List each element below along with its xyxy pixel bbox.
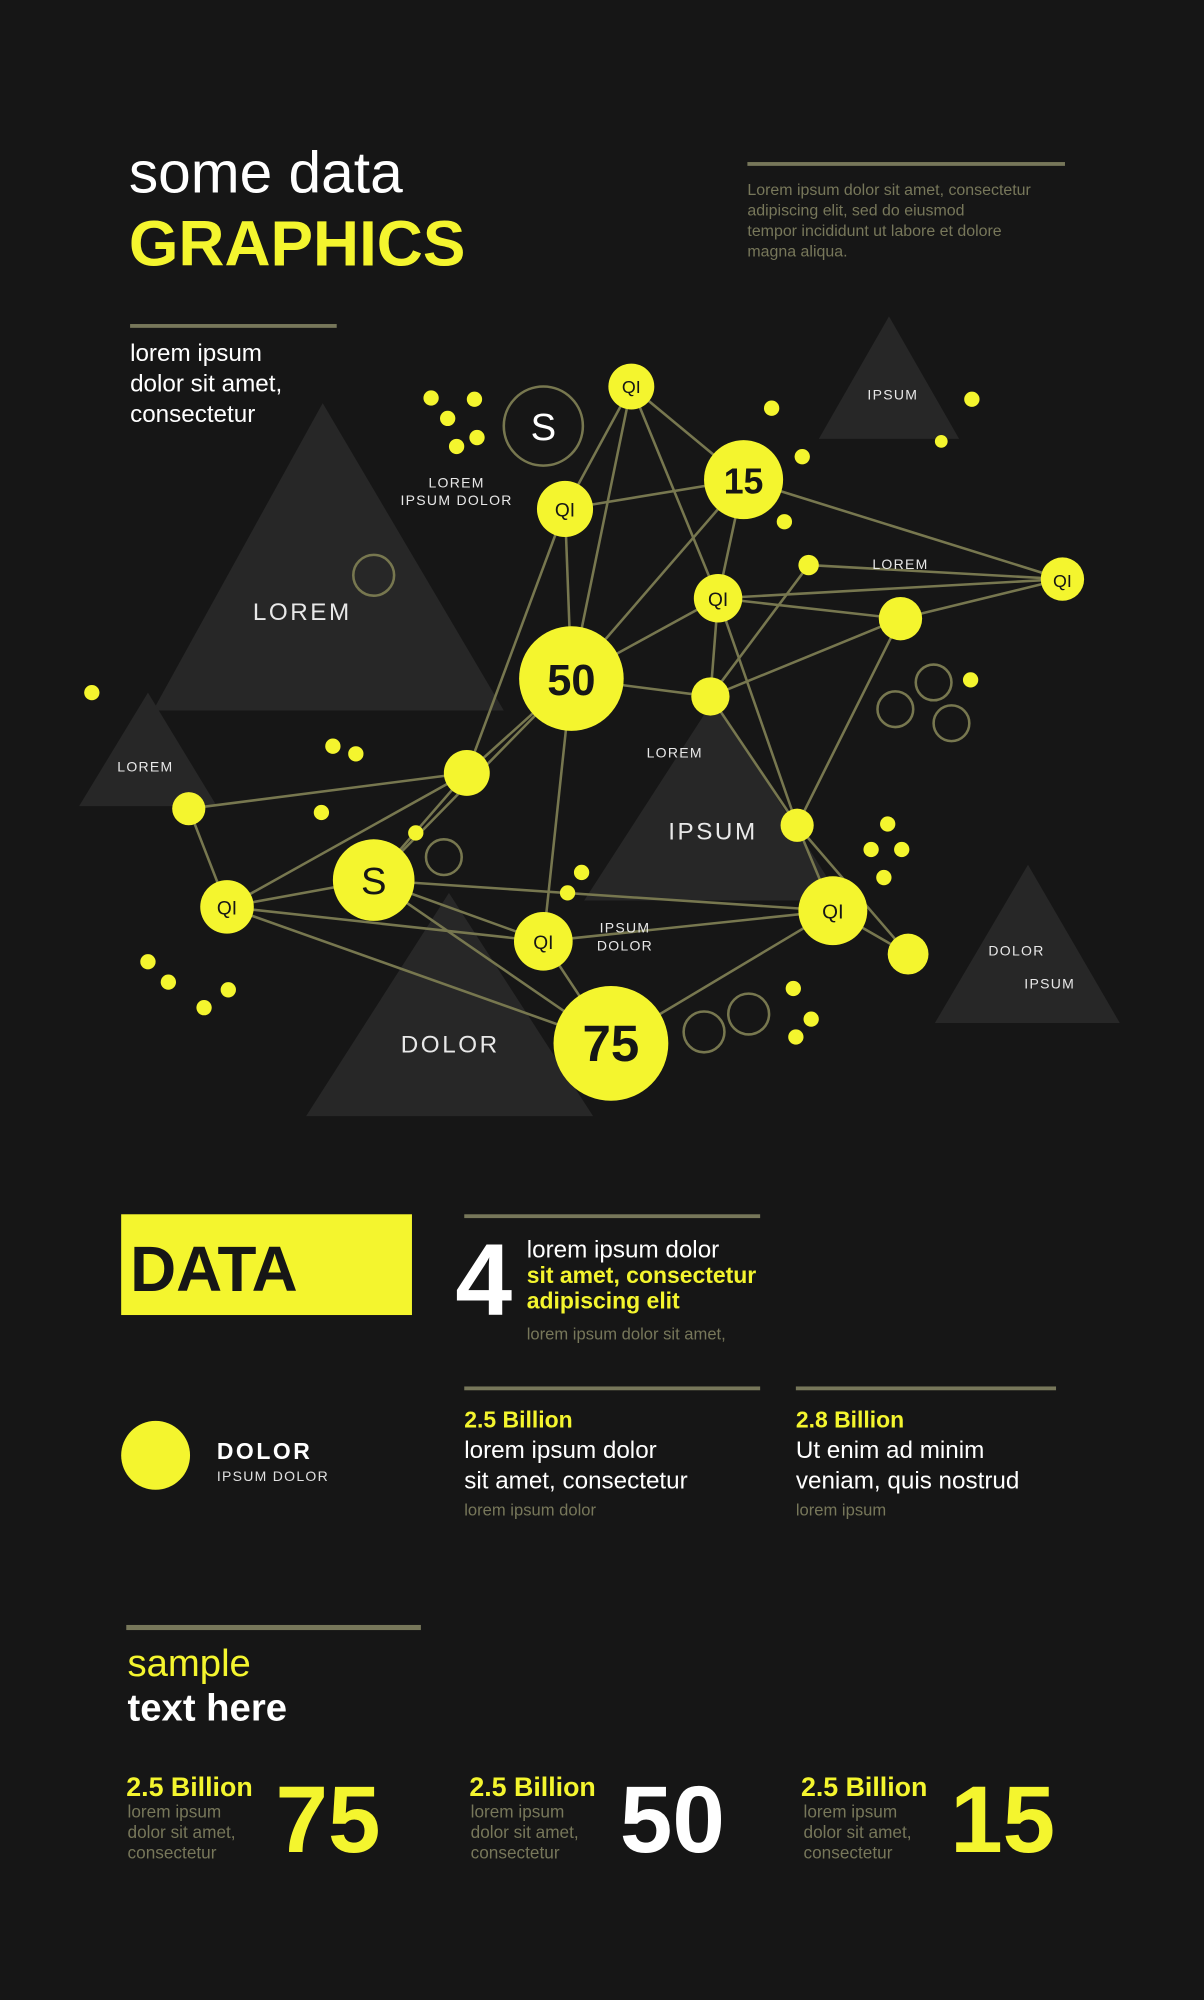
triangle labels: IPSUM xyxy=(867,386,918,402)
subtitle text xyxy=(130,324,337,428)
node labels: QI xyxy=(533,933,553,954)
node labels: QI xyxy=(555,501,575,522)
triangle labels: IPSUM xyxy=(600,919,650,935)
node labels: QI xyxy=(1053,571,1072,591)
bottom stat 50: dolor sit amet, xyxy=(471,1822,579,1842)
bottom stat 50: 50 xyxy=(620,1768,725,1873)
node labels: 50 xyxy=(547,657,596,705)
background triangles xyxy=(79,316,1120,1116)
bottom stat 50: consectetur xyxy=(471,1842,560,1862)
intro paragraph top right xyxy=(747,162,1065,260)
node labels: QI xyxy=(822,901,844,923)
stat 2.8 Billion: 2.8 Billion xyxy=(796,1406,904,1432)
intro paragraph top right: adipiscing elit, sed do eiusmod xyxy=(747,203,964,220)
stat 2.5 Billion: sit amet, consectetur xyxy=(464,1467,688,1494)
big 4 text block: 4 xyxy=(455,1223,512,1337)
stat 2.5 Billion xyxy=(464,1386,760,1519)
bottom stat 75: 75 xyxy=(275,1768,380,1873)
stat 2.8 Billion: veniam, quis nostrud xyxy=(796,1467,1019,1494)
small dots xyxy=(84,390,980,1045)
stat 2.5 Billion: lorem ipsum dolor xyxy=(464,1437,657,1464)
DOLOR legend: DOLOR xyxy=(217,1438,312,1464)
triangle labels: DOLOR xyxy=(988,942,1045,958)
bottom stat 75: lorem ipsum xyxy=(128,1802,221,1822)
triangle labels: IPSUM xyxy=(668,818,758,845)
bottom stat 75: dolor sit amet, xyxy=(128,1822,236,1842)
bottom stat 15: lorem ipsum xyxy=(804,1802,897,1822)
network nodes xyxy=(172,364,1084,1101)
big 4 text block: lorem ipsum dolor xyxy=(527,1237,719,1264)
triangle labels: IPSUM xyxy=(1024,976,1075,992)
node labels: QI xyxy=(622,377,641,397)
node labels: S xyxy=(361,860,386,903)
bottom stat 15 xyxy=(801,1768,1055,1873)
DOLOR legend xyxy=(121,1421,329,1490)
title: GRAPHICS xyxy=(129,207,465,279)
stat 2.8 Billion xyxy=(796,1386,1056,1519)
node labels: 75 xyxy=(583,1015,639,1072)
DATA block xyxy=(121,1214,412,1315)
intro paragraph top right: tempor incididunt ut labore et dolore xyxy=(747,223,1002,240)
node labels: QI xyxy=(708,590,728,611)
subtitle text: consectetur xyxy=(130,401,255,428)
sample text heading: sample xyxy=(128,1642,251,1685)
triangle labels: DOLOR xyxy=(597,937,653,953)
stat 2.8 Billion: lorem ipsum xyxy=(796,1500,886,1519)
subtitle text: dolor sit amet, xyxy=(130,371,282,398)
DOLOR legend: IPSUM DOLOR xyxy=(217,1468,329,1484)
bottom stat 15: consectetur xyxy=(804,1842,893,1862)
triangle labels: LOREM xyxy=(253,599,352,626)
outline circles xyxy=(353,387,969,1052)
intro paragraph top right: Lorem ipsum dolor sit amet, consectetur xyxy=(747,182,1032,199)
big 4 text block xyxy=(455,1214,760,1343)
stat 2.5 Billion: lorem ipsum dolor xyxy=(464,1500,596,1519)
triangle labels: LOREM xyxy=(117,759,174,775)
bottom stat 75 xyxy=(126,1768,380,1873)
triangle labels: DOLOR xyxy=(401,1031,500,1058)
intro paragraph top right: magna aliqua. xyxy=(747,243,848,260)
network lines xyxy=(189,387,1062,1043)
bottom stat 50: 2.5 Billion xyxy=(469,1772,596,1802)
S outline label: S xyxy=(531,406,556,449)
sample text heading: text here xyxy=(128,1687,287,1730)
node labels: QI xyxy=(217,899,237,920)
bottom stat 75: 2.5 Billion xyxy=(126,1772,253,1802)
triangle labels xyxy=(117,386,1075,1058)
stat 2.5 Billion: 2.5 Billion xyxy=(464,1406,573,1432)
triangle labels: LOREM xyxy=(872,556,929,572)
stat 2.8 Billion: Ut enim ad minim xyxy=(796,1437,984,1464)
DATA block: DATA xyxy=(130,1233,298,1305)
bottom stat 15: 2.5 Billion xyxy=(801,1772,927,1802)
bottom stat 50: lorem ipsum xyxy=(471,1802,564,1822)
title xyxy=(129,141,465,279)
subtitle text: lorem ipsum xyxy=(130,340,262,367)
triangle labels: LOREM xyxy=(647,745,703,761)
title: some data xyxy=(129,141,403,206)
bottom stat 75: consectetur xyxy=(128,1842,217,1862)
bottom stat 50 xyxy=(469,1768,725,1873)
big 4 text block: adipiscing elit xyxy=(527,1288,680,1314)
node labels: 15 xyxy=(724,462,763,502)
big 4 text block: sit amet, consectetur xyxy=(527,1262,756,1288)
triangle labels: LOREM xyxy=(428,474,485,490)
bottom stat 15: dolor sit amet, xyxy=(804,1822,912,1842)
sample text heading xyxy=(126,1625,421,1730)
triangle labels: IPSUM DOLOR xyxy=(401,492,513,508)
bottom stat 15: 15 xyxy=(950,1768,1055,1873)
big 4 text block: lorem ipsum dolor sit amet, xyxy=(527,1324,726,1343)
node labels xyxy=(217,377,1072,1072)
